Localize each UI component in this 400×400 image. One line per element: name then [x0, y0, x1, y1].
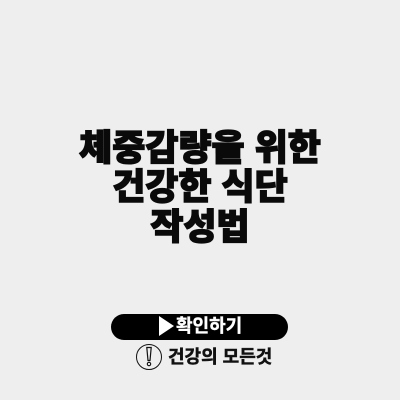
title: 작성법: [150, 206, 250, 247]
title: [78, 127, 321, 247]
site name: 건강의 모든것: [168, 347, 272, 367]
icon: exclamation circle: [136, 344, 162, 370]
icon: play triangle: [159, 316, 174, 336]
button: confirm: [111, 314, 288, 340]
title: 건강한 식단: [112, 166, 288, 207]
title: 체중감량을 위한: [79, 127, 321, 168]
button label: 확인하기: [176, 316, 242, 336]
